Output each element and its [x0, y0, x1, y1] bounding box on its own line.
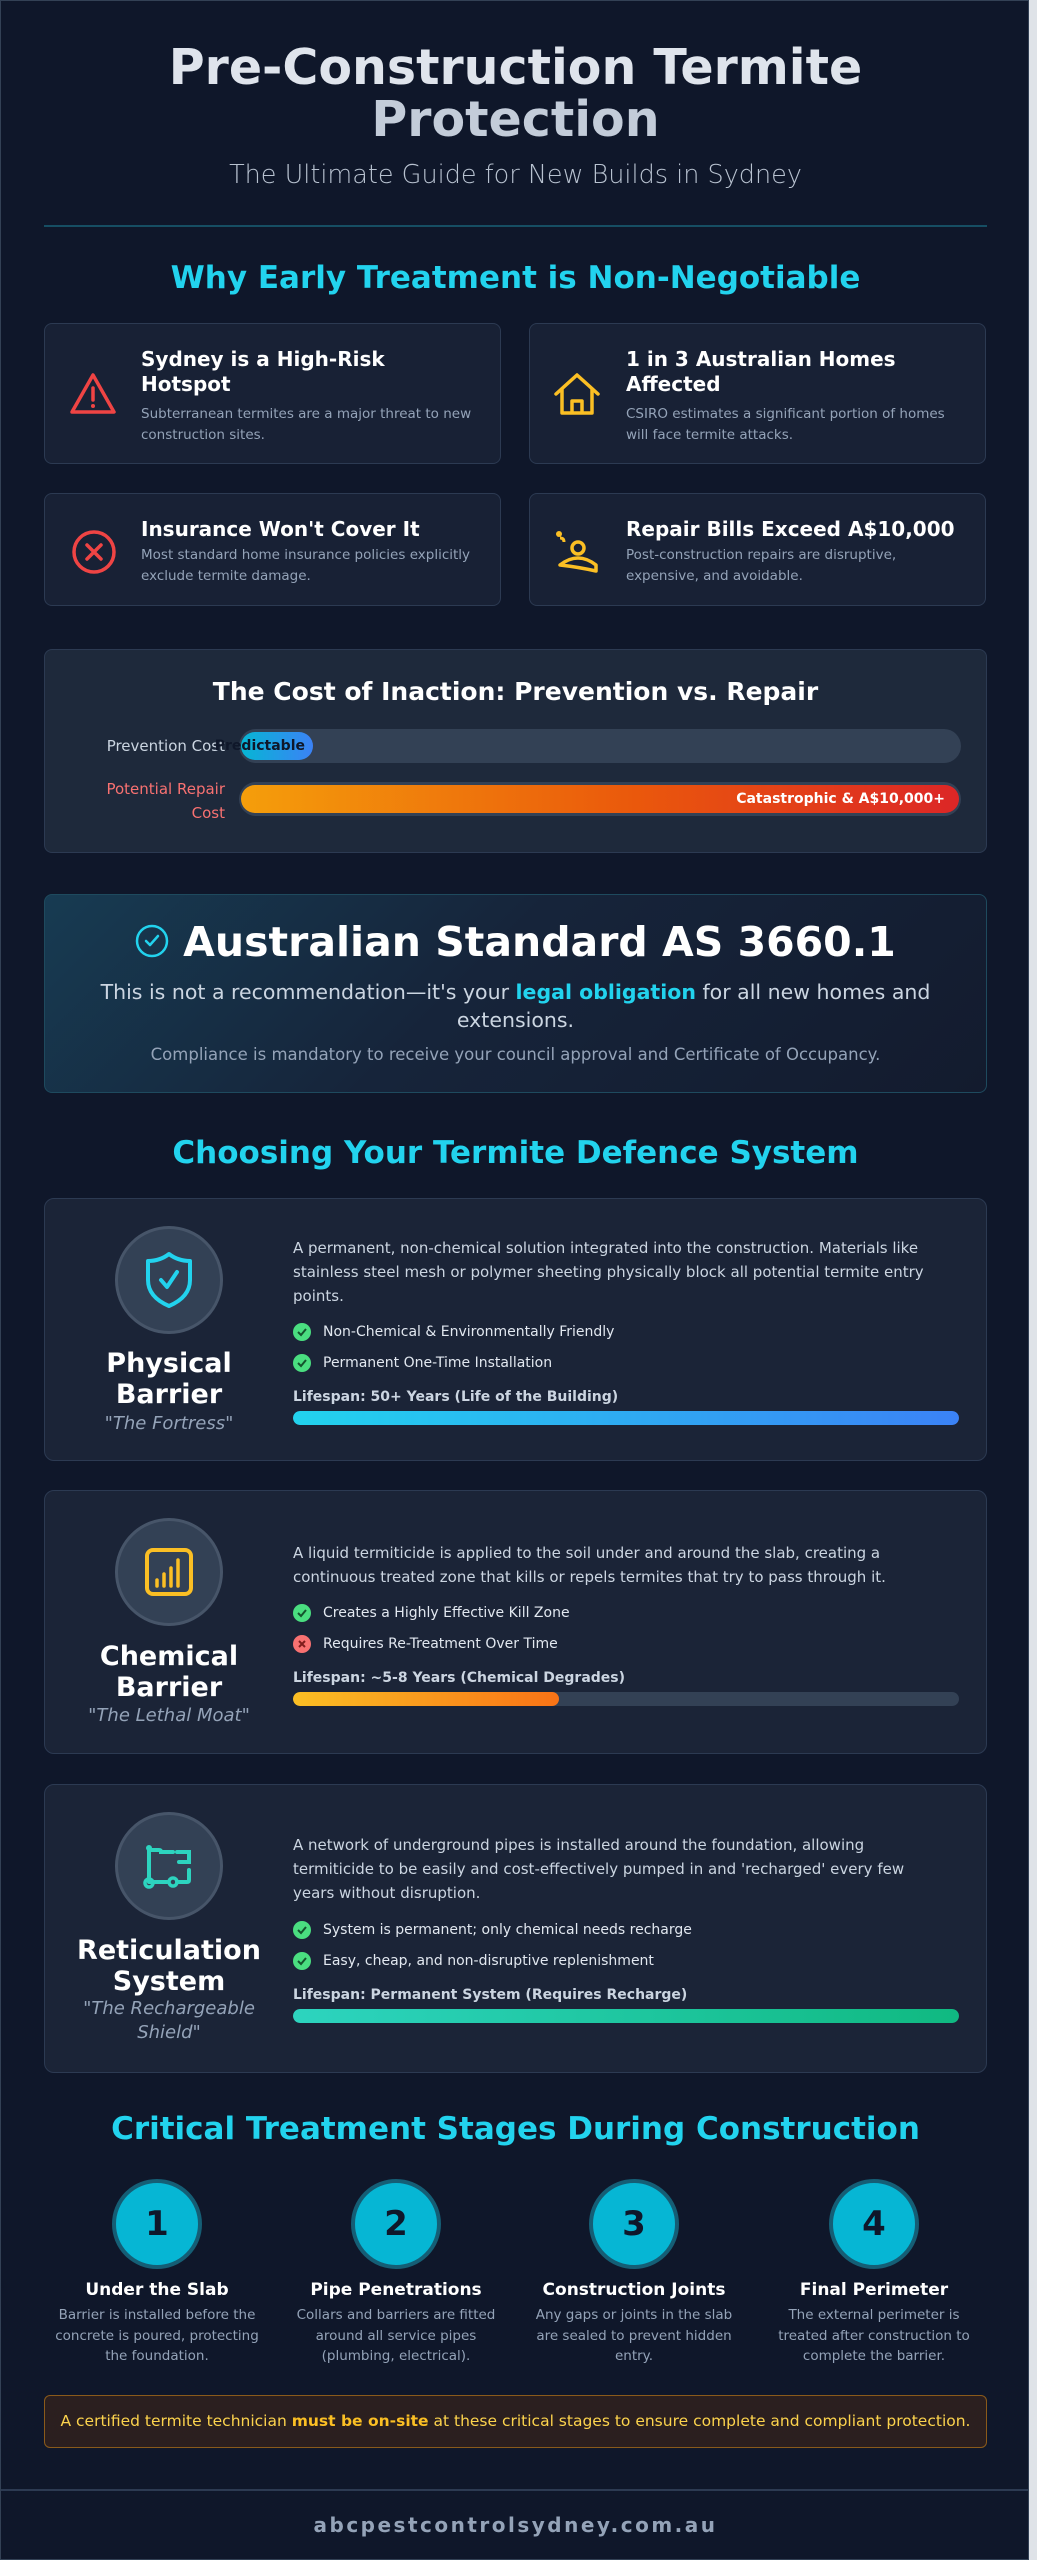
number circle [829, 2179, 919, 2269]
stage 4 [778, 2179, 970, 2364]
panel: physical barrier [44, 1198, 987, 1461]
card text: construction sites. [141, 426, 265, 442]
lifespan bar [293, 2009, 959, 2023]
bullet: System is permanent; only chemical needs recharge [323, 1922, 692, 1938]
stage 3 [536, 2179, 732, 2364]
stage title: Under the Slab [85, 2280, 229, 2300]
card title [141, 347, 385, 396]
card title [626, 347, 896, 396]
card text: expensive, and avoidable. [626, 568, 803, 584]
card: insurance [44, 493, 501, 606]
stage text: Collars and barriers are fitted around all service pipes (plumbing, electrical). [297, 2307, 495, 2364]
lifespan label: Lifespan: Permanent System (Requires Recharge) [293, 1987, 687, 2003]
panel: cost of inaction [44, 649, 987, 853]
heading: why early treatment: Why Early Treatment is Non-Negotiable [171, 260, 860, 296]
stage title: Construction Joints [543, 2280, 725, 2300]
icon: pipes [115, 1812, 223, 1920]
callout: technician on-site [44, 2395, 987, 2448]
icon: shield [115, 1226, 223, 1334]
system name: Chemical [100, 1641, 238, 1672]
nickname: "The Fortress" [105, 1413, 233, 1434]
text: legal obligation: This is not a recommendation—it's your legal obligation for all new homes and extensions. [101, 980, 930, 1032]
callout: technician on-site: A certified termite technician must be on-site at these critical stages to ensure complete and compliant protection. [60, 2412, 970, 2430]
card title: Sydney is a High-Risk [141, 347, 385, 371]
card text: will face termite attacks. [626, 426, 793, 442]
subtitle: The Ultimate Guide for New Builds in Sydney [229, 160, 802, 190]
chart title: The Cost of Inaction: Prevention vs. Repair [213, 677, 818, 706]
lifespan label: Lifespan: ~5-8 Years (Chemical Degrades) [293, 1670, 625, 1686]
bar: repair: Catastrophic & A$10,000+ [736, 791, 945, 807]
stage title: Pipe Penetrations [310, 2280, 482, 2300]
panel: chemical barrier [44, 1490, 987, 1754]
footer: abcpestcontrolsydney.com.au [314, 2513, 718, 2537]
stage text: The external perimeter is treated after construction to complete the barrier. [778, 2307, 970, 2364]
bar: prevention [239, 729, 961, 763]
number circle [589, 2179, 679, 2269]
nickname: "The Lethal Moat" [88, 1705, 250, 1726]
system name [100, 1641, 238, 1703]
card: repair bills [529, 493, 986, 606]
nickname [83, 1998, 255, 2043]
lifespan bar [293, 1692, 959, 1706]
bar: prevention: Predictable [215, 738, 305, 754]
label: potential repair [106, 780, 226, 822]
bullet: Creates a Highly Effective Kill Zone [323, 1605, 570, 1621]
icon: warning triangle [70, 373, 116, 414]
number circle: 2 [384, 2204, 408, 2244]
card text [141, 406, 471, 442]
card title: 1 in 3 Australian Homes [626, 347, 896, 371]
system name: Barrier [116, 1379, 222, 1410]
card: 1 in 3 homes [529, 323, 986, 464]
heading with check icon: Australian Standard AS 3660.1 [183, 918, 896, 966]
card text [626, 547, 896, 584]
stage 2 [297, 2179, 495, 2364]
title: Protection [371, 91, 660, 148]
card text: exclude termite damage. [141, 568, 311, 584]
icon: chart [115, 1518, 223, 1626]
panel: reticulation system [44, 1784, 987, 2073]
title [169, 39, 862, 148]
description: A permanent, non-chemical solution integrated into the construction. Materials like stainless steel mesh or polymer sheeting physically block all potential termite entry points. [293, 1239, 924, 1305]
icon: circle x [72, 530, 116, 574]
description: A liquid termiticide is applied to the soil under and around the slab, creating a continuous treated zone that kills or repels termites that try to pass through it. [293, 1544, 886, 1586]
number circle [112, 2179, 202, 2269]
label: prevention: Prevention Cost [107, 737, 225, 755]
card text [141, 547, 470, 584]
system name: Physical [106, 1348, 232, 1379]
card title: Hotspot [141, 372, 231, 396]
bullet: Non-Chemical & Environmentally Friendly [323, 1324, 614, 1340]
card title: Insurance Won't Cover It [141, 517, 420, 541]
label: potential repair: Cost [192, 804, 225, 822]
card: high-risk hotspot [44, 323, 501, 464]
lifespan bar [293, 1411, 959, 1425]
label: potential repair: Potential Repair [106, 780, 225, 798]
card title: Repair Bills Exceed A$10,000 [626, 517, 955, 541]
bar: repair [239, 782, 961, 816]
lifespan label: Lifespan: 50+ Years (Life of the Building) [293, 1389, 618, 1405]
card text: Subterranean termites are a major threat to new [141, 406, 471, 422]
nickname: Shield" [137, 2022, 201, 2043]
panel: australian standard [44, 894, 987, 1093]
title: Pre-Construction Termite [169, 39, 862, 96]
card title: Affected [626, 372, 721, 396]
card text: Most standard home insurance policies explicitly [141, 547, 470, 563]
nickname: "The Rechargeable [83, 1998, 255, 2019]
number circle [351, 2179, 441, 2269]
bullet: Requires Re-Treatment Over Time [323, 1636, 558, 1652]
number circle: 3 [622, 2204, 646, 2244]
stage 1 [55, 2179, 259, 2364]
system name: Reticulation [77, 1935, 261, 1966]
system name: Barrier [116, 1672, 222, 1703]
card text: Post-construction repairs are disruptive, [626, 547, 896, 563]
system name: System [113, 1966, 225, 1997]
card text: CSIRO estimates a significant portion of homes [626, 406, 945, 422]
heading: critical stages: Critical Treatment Stages During Construction [111, 2111, 920, 2147]
stage text: Any gaps or joints in the slab are sealed to prevent hidden entry. [536, 2307, 732, 2364]
icon: check circle [136, 924, 168, 958]
stage text: Barrier is installed before the concrete is poured, protecting the foundation. [55, 2307, 259, 2364]
text: compliance: Compliance is mandatory to receive your council approval and Certificate of Occupancy. [151, 1045, 880, 1064]
card text [626, 406, 945, 442]
number circle: 4 [862, 2204, 886, 2244]
description: A network of underground pipes is installed around the foundation, allowing termiticide to be easily and cost-effectively pumped in and 'recharged' every few years without disruption. [293, 1836, 904, 1902]
system name [106, 1348, 232, 1410]
heading: choosing system: Choosing Your Termite Defence System [172, 1135, 859, 1171]
bullet: Easy, cheap, and non-disruptive replenishment [323, 1953, 654, 1969]
icon: person with cost [556, 531, 598, 573]
icon: house [554, 373, 600, 415]
number circle: 1 [145, 2204, 169, 2244]
bullet: Permanent One-Time Installation [323, 1355, 552, 1371]
stage title: Final Perimeter [800, 2280, 948, 2300]
system name [77, 1935, 261, 1997]
